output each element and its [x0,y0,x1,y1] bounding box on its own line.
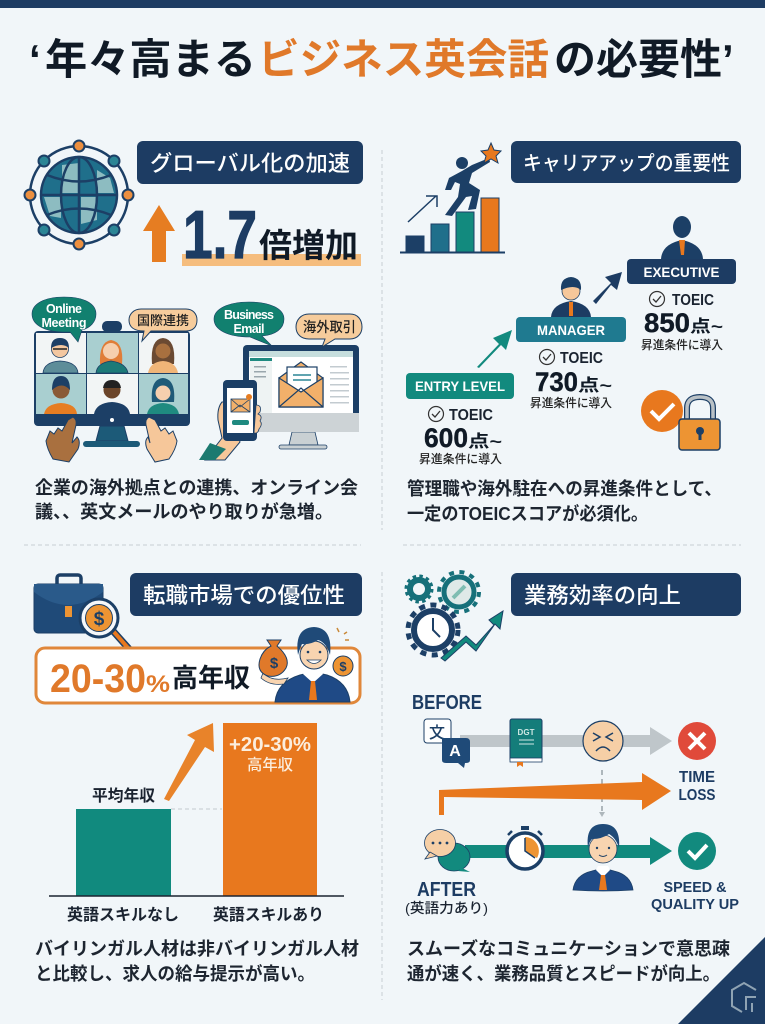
panel: globalization [24,140,363,522]
corner logo [678,937,765,1024]
icon: right hand [146,417,177,462]
callout: 20-30% higher income: 高年収 [172,663,250,693]
title: ’ [722,36,734,83]
icon: briefcase and magnifier: $ [94,609,105,630]
arrow: orange connector [439,773,671,815]
bar: with English: +20-30% [229,734,311,756]
icon: green check [678,832,716,870]
bar: with English: 高年収 [247,756,293,774]
callout: 20-30% higher income: % [146,671,170,698]
title: ビジネス英会話 [258,36,549,83]
icon: globe network [24,140,134,250]
heading: efficiency [511,573,741,616]
career step: executive: 昇進条件に導入 [641,337,723,352]
career step: manager: 点~ [578,376,612,395]
icon: dictionary [510,719,542,767]
text: career description: 一定のTOEICスコアが必須化。 [407,503,648,524]
icon: chat bubbles [424,830,470,872]
career step: executive: 850 [644,308,690,338]
label: TIME LOSS: TIME [679,769,715,786]
panel: efficiency [405,572,741,984]
panel: career [400,141,741,524]
bubble: 国際連携 [129,309,197,341]
axis labels [67,906,324,924]
bubble: 海外取引: 海外取引 [303,319,356,335]
heading: job market: 転職市場での優位性 [143,583,345,608]
text: job market description: と比較し、求人の給与提示が高い。 [35,963,315,984]
career step: manager: 昇進条件に導入 [530,395,612,410]
text: career description [407,478,722,524]
bubble: Online Meeting: Meeting [42,316,86,330]
callout: 20-30% higher income: 20-30 [50,657,146,701]
arrow: after flow [465,837,672,865]
icon: frustrated face [583,721,623,761]
text: career description: 管理職や海外駐在への昇進条件として、 [407,478,722,499]
career step: manager [516,277,626,410]
label: TIME LOSS: LOSS [678,787,716,804]
icon: briefcase and magnifier [34,575,130,650]
icon: stopwatch [507,826,543,869]
icon: businessman with money bag: $ [339,659,347,674]
bubble: Online Meeting: Online [46,302,82,316]
label: AFTER: (英語力あり) [405,900,488,916]
text: globalization description [35,478,358,522]
career step: entry level: ENTRY LEVEL [415,378,505,394]
icon: climbing figure over bars [400,143,505,252]
axis labels: 英語スキルあり [213,906,324,924]
arrow: manager to executive [593,272,622,304]
icon: businessman with money bag [259,627,353,702]
bubble: Business Email: Business [224,308,274,322]
career step: entry level [406,373,514,466]
label: AFTER [405,879,488,916]
career step: entry level: TOEIC [449,407,493,424]
arrow: entry to manager [477,330,512,368]
stat: 1.7x increase: 倍増加 [259,227,358,264]
panel: job market [34,573,362,984]
career step: executive: TOEIC [672,292,714,309]
axis labels: 英語スキルなし [67,906,179,924]
career step: executive [627,216,736,352]
heading: globalization [137,141,363,184]
stat: 1.7x increase: 1.7 [183,197,257,273]
text: efficiency description: スムーズなコミュニケーションで意思疎 [407,938,730,959]
career step: executive: 点~ [690,317,723,336]
heading: job market [130,573,362,616]
bubble: 国際連携: 国際連携 [137,313,189,328]
text: efficiency description [407,938,730,984]
heading: efficiency: 業務効率の向上 [524,583,681,608]
career step: entry level: 600 [424,423,468,453]
label: SPEED & QUALITY UP [651,879,739,913]
icon: red cross [678,722,716,760]
label: AFTER: AFTER [417,879,476,901]
icon: check and lock [641,390,720,450]
label: TIME LOSS [678,769,716,804]
text: efficiency description: 通が速く、業務品質とスピードが向上。 [407,963,720,984]
icon: translate [424,719,470,768]
icon: translate: 文 [429,724,445,742]
icon: businessman with money bag: $ [270,655,279,672]
text: job market description: バイリンガル人材は非バイリンガル人材 [35,939,359,959]
icon: hand holding phone [205,402,240,460]
label: SPEED & QUALITY UP: SPEED & [664,879,727,896]
title [29,36,734,83]
career step: executive: EXECUTIVE [644,264,720,280]
bar chart: income comparison [49,723,344,924]
career step: manager: 730 [535,367,578,397]
title: の必要性 [554,36,722,83]
title: ‘ [29,36,41,83]
career step: entry level: 点~ [468,432,502,451]
icon: gears and rising arrow [406,572,503,661]
top bar [0,0,765,8]
heading: globalization: グローバル化の加速 [150,151,350,176]
icon: left hand [46,417,79,462]
title: 年々高まる [45,36,256,83]
illustration: email on monitor and phone [199,345,359,460]
text: globalization description: 企業の海外拠点との連携、オンライン会 [35,478,358,498]
career step: manager: TOEIC [560,350,603,367]
bubble: Business Email [214,302,284,346]
bar: without English [76,809,171,896]
text: globalization description: 議、、英文メールのやり取りが急増。 [35,501,333,522]
stat: 1.7x increase [143,197,361,273]
label: average income: 平均年収 [92,786,155,805]
career step: manager: MANAGER [537,322,605,338]
bubble: Business Email: Email [234,322,264,336]
icon: envelope [279,362,323,407]
arrow: before flow [460,727,672,755]
icon: dictionary: DGT [518,728,535,737]
heading: career [511,141,741,183]
illustration: video meeting [34,321,190,462]
bubble: Online Meeting [32,297,96,342]
bar: with English [223,723,317,896]
arrow: income up [164,723,214,801]
label: BEFORE: BEFORE [412,692,482,714]
icon: translate: A [449,743,461,760]
callout: 20-30% higher income [36,627,360,703]
icon: businessman [573,824,633,891]
heading: career: キャリアアップの重要性 [523,152,730,175]
bubble: 海外取引 [296,314,362,347]
label: SPEED & QUALITY UP: QUALITY UP [651,896,739,913]
career step: entry level: 昇進条件に導入 [419,451,502,466]
text: job market description [35,939,359,984]
